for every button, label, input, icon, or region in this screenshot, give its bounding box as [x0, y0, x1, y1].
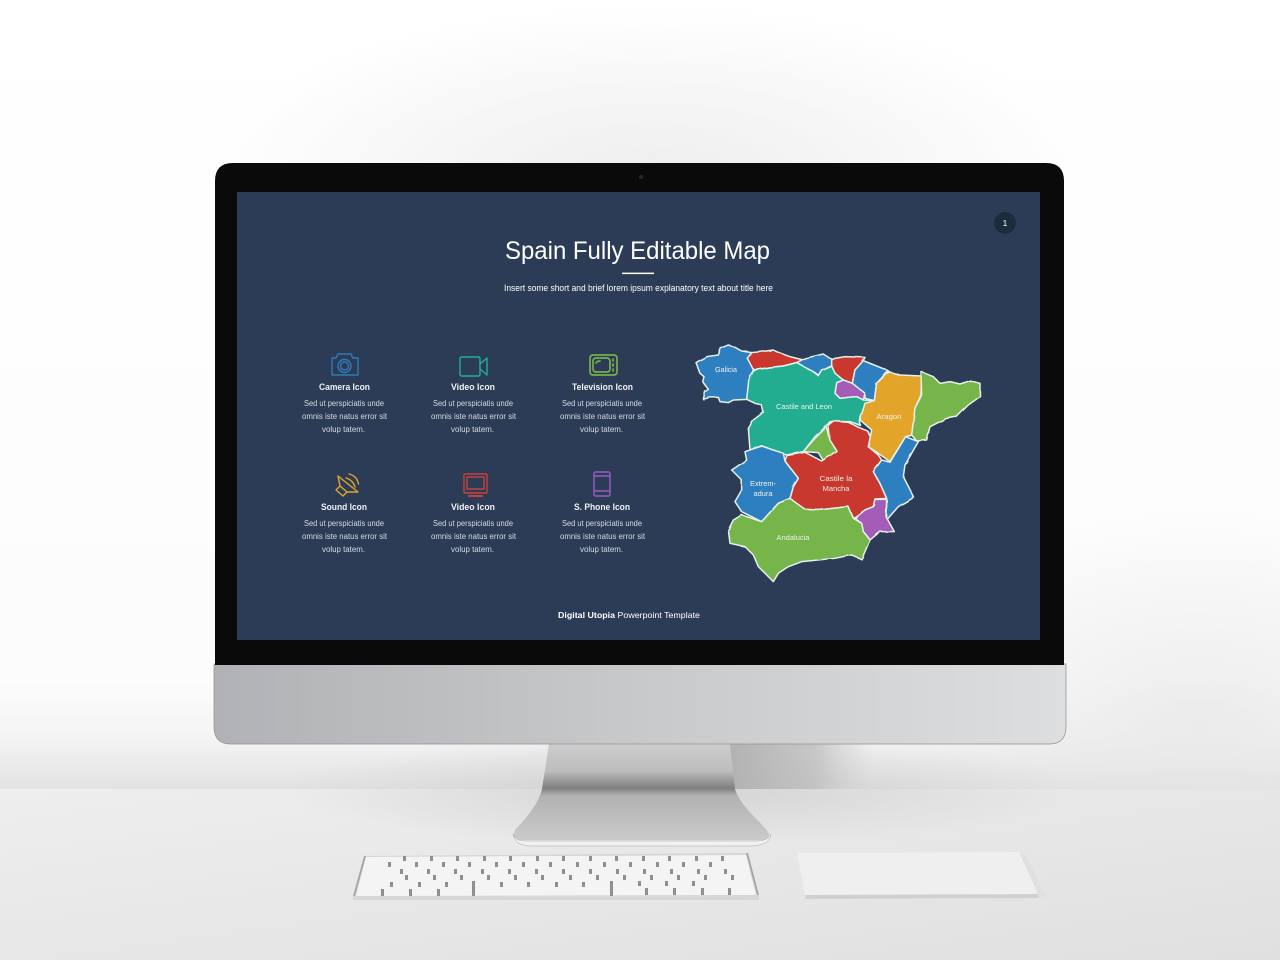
- text: television: Sed ut perspiciatis unde: [562, 399, 643, 408]
- region: Asturias: [747, 350, 803, 370]
- text: television: omnis iste natus error sit: [560, 412, 646, 421]
- region: Murcia: [855, 499, 894, 540]
- trackpad shadow: [1020, 855, 1046, 897]
- region: Catalonia: [912, 372, 980, 441]
- title: Spain Fully Editable Map: [505, 237, 770, 265]
- monitor: [214, 163, 1066, 744]
- region: Castile la Mancha: [785, 421, 887, 518]
- text: camera: [302, 399, 388, 434]
- text: smart phone: Sed ut perspiciatis unde: [562, 519, 643, 528]
- map labels: Galicia: [715, 365, 738, 374]
- region: Aragon: [860, 372, 922, 462]
- map labels: adura: [754, 489, 773, 498]
- page number badge: 1: [1003, 218, 1008, 228]
- region: Valencia: [873, 437, 918, 520]
- footer: Digital Utopia Powerpoint Template: [558, 610, 700, 620]
- map labels: Aragon: [876, 412, 902, 421]
- text: monitor: volup tatem.: [451, 545, 494, 554]
- item: monitor: [431, 474, 517, 554]
- monitor bezel: [215, 163, 1064, 665]
- text: video: omnis iste natus error sit: [431, 412, 517, 421]
- map labels: Castile la: [820, 474, 853, 483]
- text: video: volup tatem.: [451, 425, 494, 434]
- text: sound: volup tatem.: [322, 545, 365, 554]
- trackpad: [797, 852, 1046, 899]
- region: La Rioja: [835, 380, 865, 400]
- item: smart phone: [560, 472, 646, 554]
- wall glow behind monitor: [210, 5, 1090, 345]
- item: television: [560, 355, 646, 434]
- subtitle: Insert some short and brief lorem ipsum explanatory text about title here: [504, 283, 773, 293]
- text: monitor: Sed ut perspiciatis unde: [433, 519, 514, 528]
- region: Madrid: [803, 427, 837, 461]
- region: Andalucia: [728, 498, 870, 582]
- text: camera: Sed ut perspiciatis unde: [304, 399, 385, 408]
- webcam: [639, 175, 643, 179]
- item: sound: [302, 474, 388, 554]
- trackpad surface: [797, 852, 1038, 895]
- trackpad lip: [805, 892, 1038, 899]
- heading: video: Video Icon: [451, 382, 495, 393]
- region: Basque Country: [832, 357, 865, 383]
- icon: video camera: [460, 357, 487, 376]
- map labels: Andalucia: [776, 533, 810, 542]
- region: Extremadura: [732, 446, 798, 522]
- region: Galicia: [696, 345, 753, 403]
- icon: television: [590, 355, 617, 375]
- map of Spain: [696, 345, 980, 582]
- desk shadow near stand: [280, 735, 1080, 845]
- heading: sound: Sound Icon: [321, 502, 367, 513]
- text: smart phone: volup tatem.: [580, 545, 623, 554]
- stand shadow on wall: [730, 744, 872, 789]
- map labels: [715, 365, 902, 542]
- text: video: [431, 399, 517, 434]
- map labels: Mancha: [822, 484, 850, 493]
- region: Navarra: [852, 361, 888, 401]
- text: monitor: [431, 519, 517, 554]
- wall shading at lower right: [870, 510, 1280, 930]
- heading: monitor video: Video Icon: [451, 502, 495, 513]
- icon: smart phone: [594, 472, 610, 496]
- icon: monitor: [464, 474, 487, 496]
- text: camera: omnis iste natus error sit: [302, 412, 388, 421]
- text: monitor: omnis iste natus error sit: [431, 532, 517, 541]
- page number badge: [994, 212, 1016, 234]
- heading: television: Television Icon: [572, 382, 633, 393]
- item: video: [431, 357, 517, 434]
- region: Cantabria: [797, 354, 837, 375]
- text: video: Sed ut perspiciatis unde: [433, 399, 514, 408]
- desk surface: [0, 789, 1280, 960]
- map labels: Castile and Leon: [776, 402, 832, 411]
- keyboard: [353, 853, 759, 900]
- slide screen: [237, 192, 1040, 640]
- item: camera: [302, 354, 388, 434]
- title underline: [622, 273, 654, 274]
- monitor stand: [513, 744, 771, 846]
- text: television: volup tatem.: [580, 425, 623, 434]
- text: sound: Sed ut perspiciatis unde: [304, 519, 385, 528]
- icon: speaker: [336, 474, 358, 496]
- text: smart phone: omnis iste natus error sit: [560, 532, 646, 541]
- text: smart phone: [560, 519, 646, 554]
- monitor chin: [214, 664, 1066, 744]
- icon: camera: [332, 354, 358, 375]
- heading: smart phone: S. Phone Icon: [574, 502, 630, 513]
- text: television: [560, 399, 646, 434]
- region: Castile and Leon: [747, 363, 874, 455]
- text: sound: [302, 519, 388, 554]
- map labels: Extrem-: [750, 479, 776, 488]
- text: sound: omnis iste natus error sit: [302, 532, 388, 541]
- text: camera: volup tatem.: [322, 425, 365, 434]
- heading: camera: Camera Icon: [319, 382, 370, 393]
